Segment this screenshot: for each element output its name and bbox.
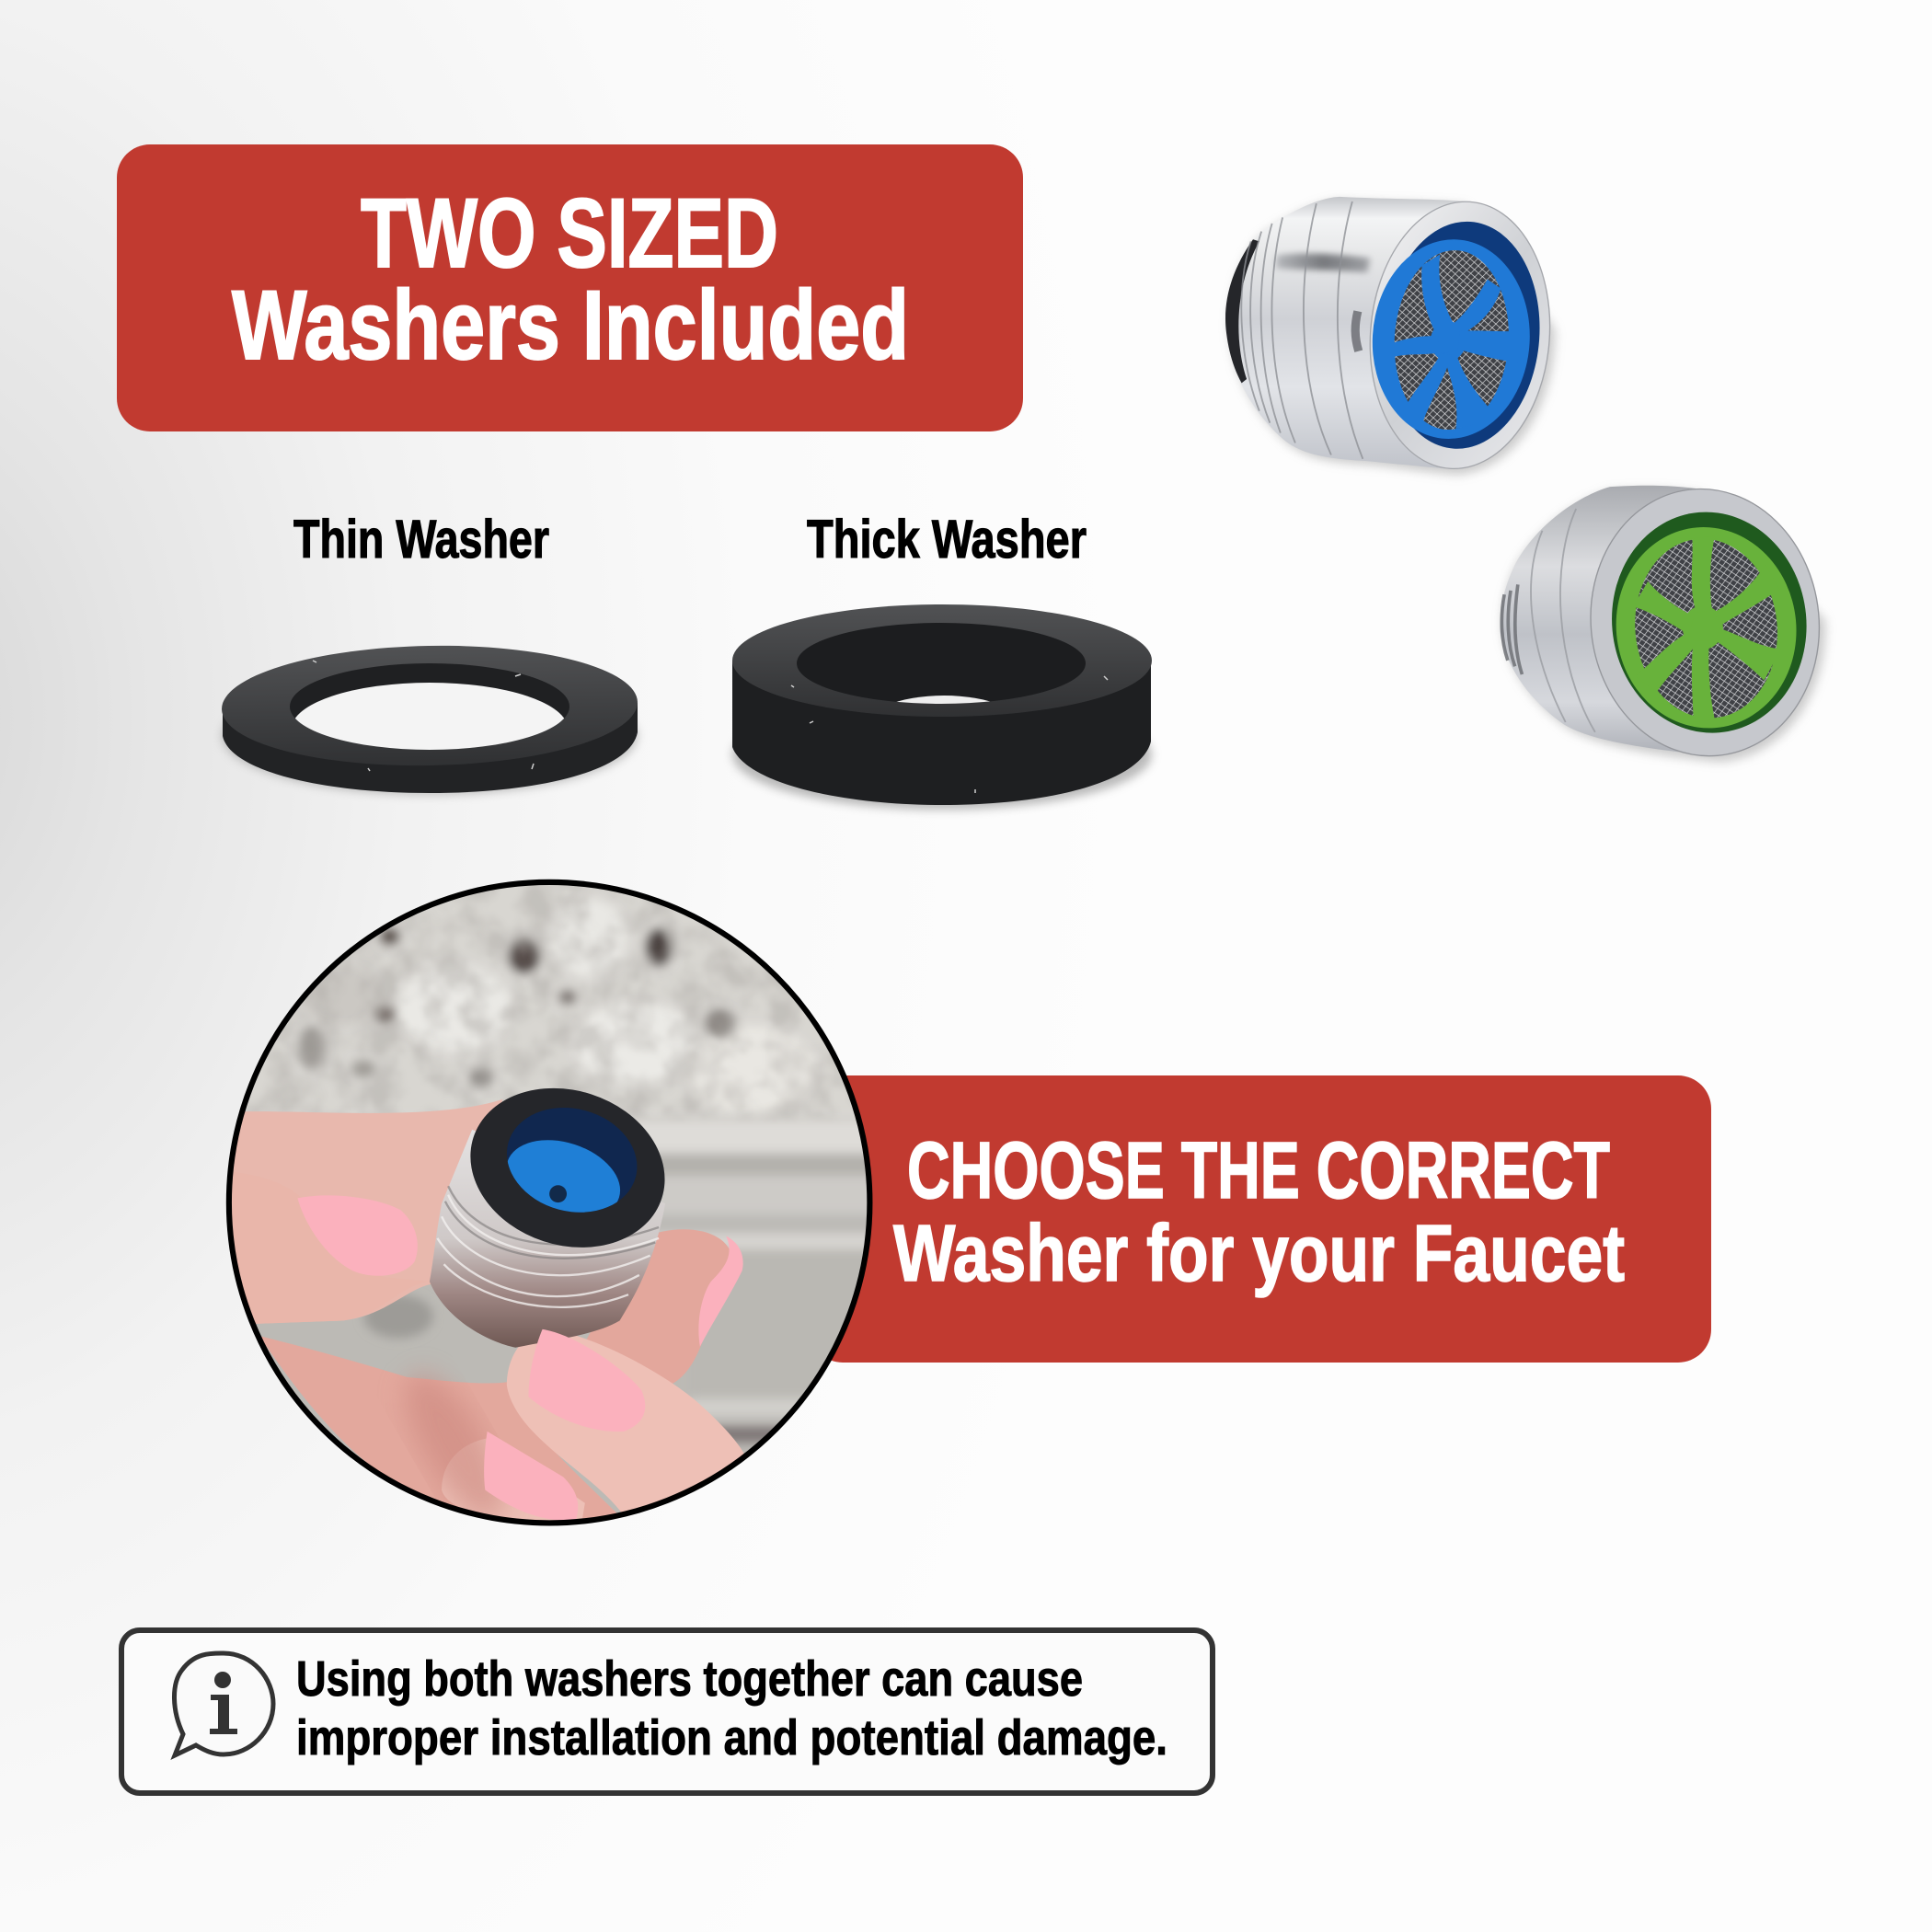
green insert with mesh and spokes [1607,520,1805,735]
note line 2: improper installation and potential damage. [296,1710,1167,1765]
blue insert with mesh and spokes [1367,236,1535,443]
heading: washer for your faucet: Washer for your Faucet [893,1209,1625,1298]
granite countertop [245,885,856,1119]
aerator in hand [429,1087,665,1348]
aerator: green [1500,480,1831,765]
sink edge bands [361,1116,867,1448]
label: thin washer: Thin Washer [293,510,549,569]
chrome body [1226,197,1466,469]
photo: hand holding aerator [212,865,892,1546]
panel: choose the correct washer [810,1075,1711,1363]
icon: info speech bubble [174,1653,273,1755]
face rim [1361,196,1559,475]
painted nails [297,1195,743,1522]
thin washer [221,642,638,795]
fingers [220,1099,744,1534]
heading: two sized: TWO SIZED [361,178,778,288]
thick washer [732,604,1152,810]
panel: two sized washers heading [117,144,1023,431]
note line 1: Using both washers together can cause [296,1651,1083,1707]
heading: washers included: Washers Included [232,270,909,380]
chrome body [1500,486,1716,756]
aerator: blue [1225,196,1559,475]
granite mottling [246,885,845,1119]
callout: warning note [121,1630,1213,1793]
face rim [1579,480,1831,765]
label: thick washer: Thick Washer [807,510,1087,569]
heading: choose the correct: CHOOSE THE CORRECT [907,1126,1610,1215]
